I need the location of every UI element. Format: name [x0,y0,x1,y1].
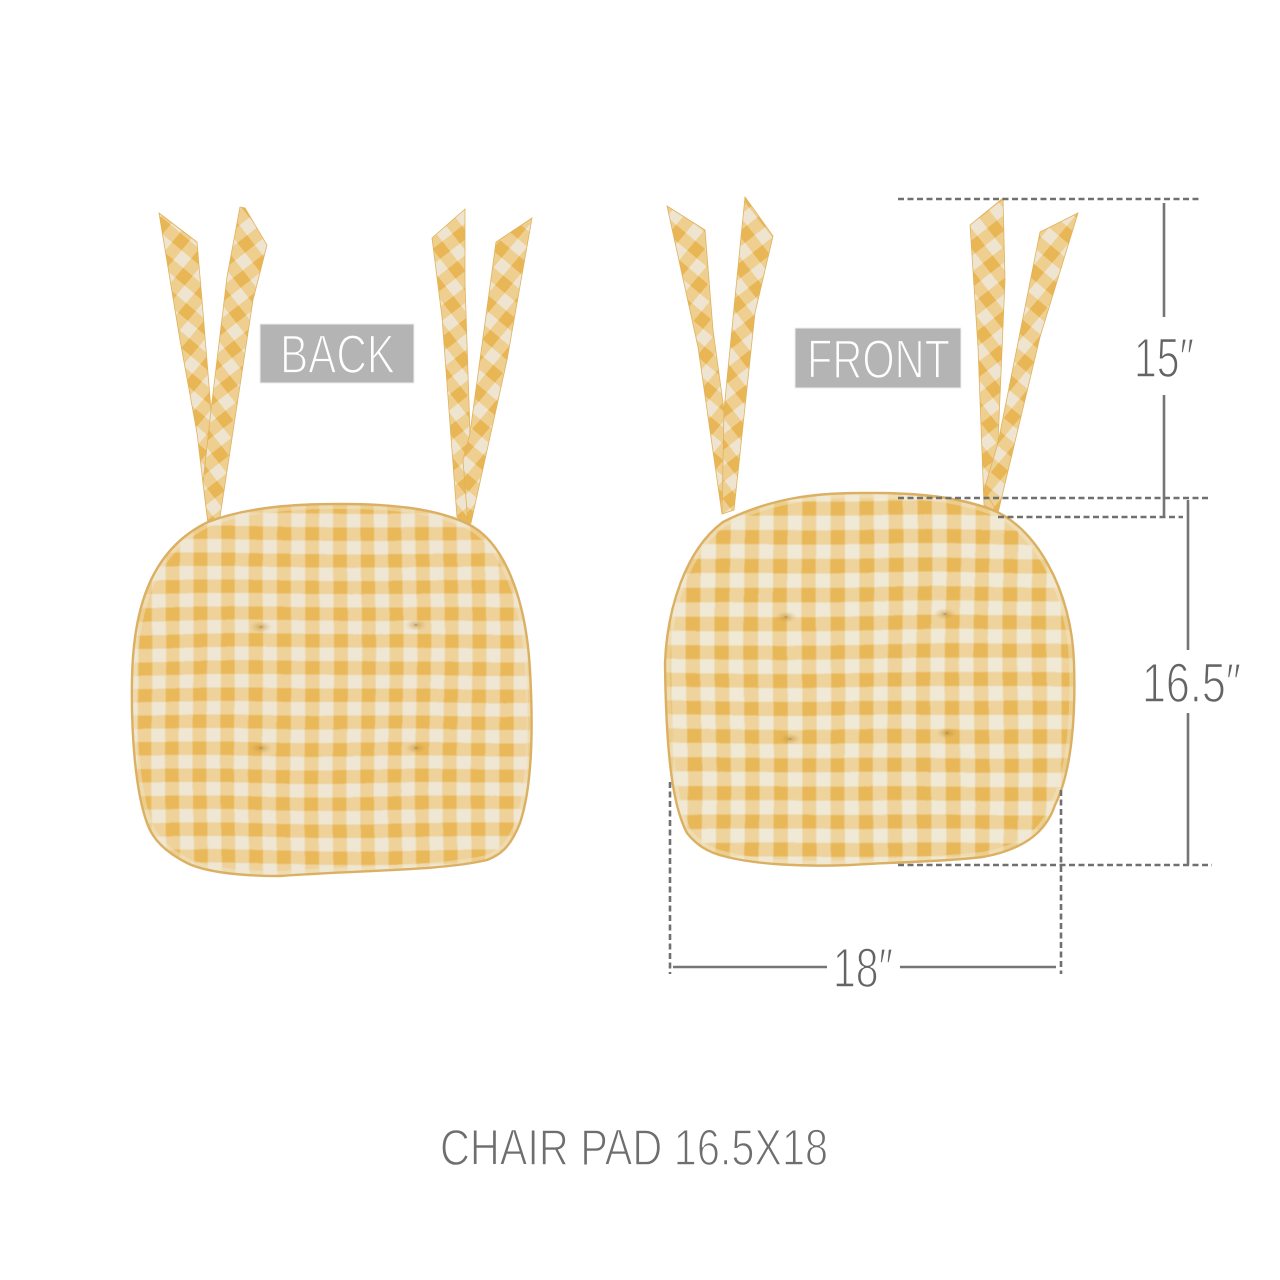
dimension: pad depth 16.5 inches: 16.5″ [1142,651,1241,714]
dimension: pad width 18 inches [670,782,1061,999]
caption: CHAIR PAD 16.5X18 [440,1119,828,1176]
back view ties [159,207,532,525]
panel: front view chair pad [650,197,1090,880]
front view ties [667,197,1078,514]
panel: back view chair pad [120,207,540,890]
dimension: pad width 18 inches: 18″ [833,936,893,999]
dimension: tie length 15 inches [898,199,1200,517]
front view cushion [664,492,1076,867]
infographic canvas [130,196,1240,1165]
BACK label: BACK [280,323,395,385]
back view cushion [130,502,533,878]
dimension: tie length 15 inches: 15″ [1134,326,1194,389]
FRONT label: FRONT [807,328,950,390]
dimension: pad depth 16.5 inches [898,498,1241,865]
